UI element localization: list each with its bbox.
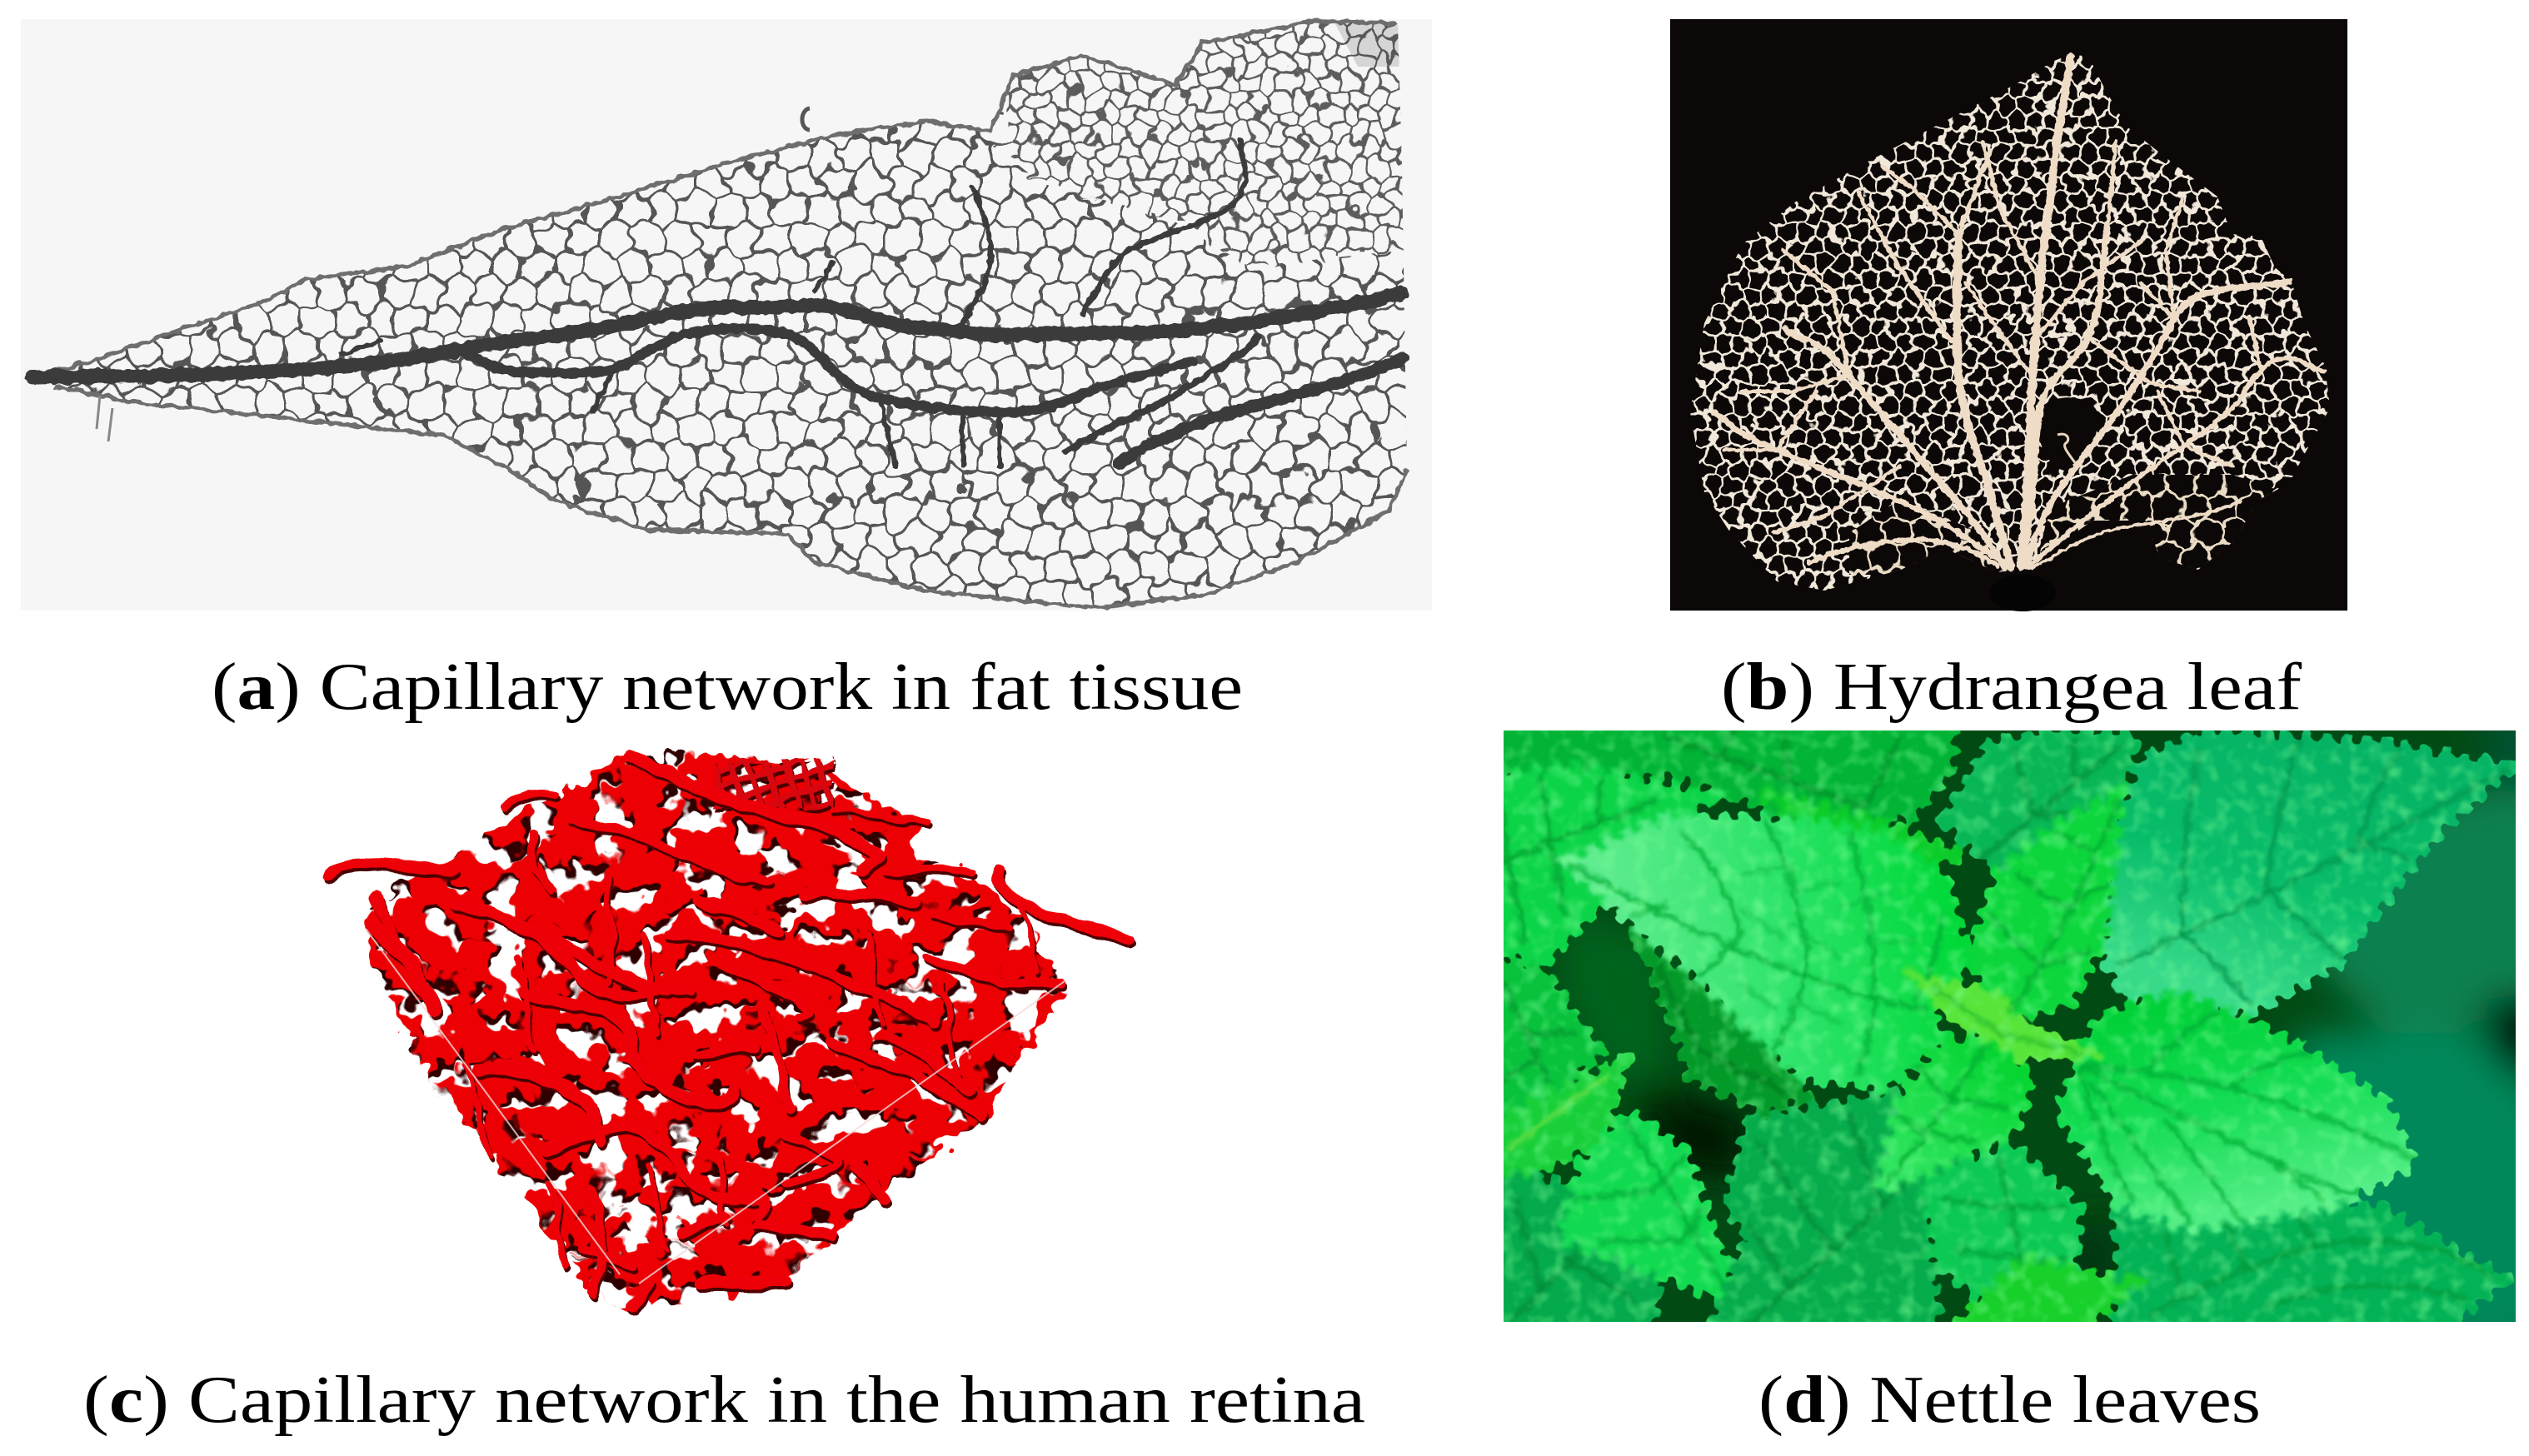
leaf hole bbox=[2038, 397, 2098, 471]
panel a: capillary network in fat tissue bbox=[0, 0, 1466, 633]
ink mark c bbox=[802, 108, 810, 130]
leaf: large upper right bbox=[2108, 733, 2510, 1010]
leaf vein mesh bbox=[1690, 55, 2329, 591]
leaf: left centre small bbox=[1644, 948, 1804, 1109]
leaf: bottom centre dark bbox=[1710, 1094, 1958, 1333]
main blood vessels bbox=[32, 141, 1402, 466]
leaf: centre lower bbox=[1881, 1038, 2032, 1189]
tissue outline bbox=[32, 21, 1407, 608]
caption a: (a) Capillary network in fat tissue bbox=[212, 651, 1243, 724]
stem bbox=[1989, 575, 2056, 611]
ink mark d bbox=[97, 396, 112, 441]
leaf: bottom left bbox=[1491, 1175, 1657, 1333]
leaf: lime bud left bbox=[1491, 1062, 1624, 1170]
caption c: (c) Capillary network in the human retina bbox=[83, 1364, 1365, 1437]
leaf: bottom centre bbox=[1924, 1147, 2078, 1312]
capillary mesh bbox=[47, 22, 1407, 608]
primary veins bbox=[1714, 57, 2324, 568]
panel d: nettle leaves bbox=[1504, 730, 2516, 1322]
panel b: hydrangea leaf skeleton bbox=[1658, 8, 2366, 625]
leaf: lime bud centre bbox=[1911, 975, 2105, 1057]
dense vessel cluster at top bbox=[713, 759, 833, 809]
leaf: top centre bbox=[1944, 733, 2135, 872]
caption d: (d) Nettle leaves bbox=[1758, 1364, 2261, 1437]
leaf: bottom right bbox=[2118, 1208, 2503, 1333]
leaf: large left centre bbox=[1569, 818, 1968, 1085]
faint bounding grid lines bbox=[366, 929, 1065, 1284]
large vessels bbox=[328, 756, 1130, 1308]
leaf: top left bbox=[1491, 725, 1951, 815]
serrated leaves bbox=[1491, 725, 2510, 1333]
dense tangled vessel mass bbox=[367, 748, 1068, 1313]
leaf: centre spear bbox=[1971, 795, 2118, 1019]
leaf: lower left bright bbox=[1563, 1114, 1737, 1303]
leaf: right lower bbox=[2058, 995, 2412, 1227]
leaf: left lower bbox=[1491, 962, 1599, 1119]
panel c: capillary network in the human retina bbox=[323, 748, 1136, 1316]
blurred background leaves bbox=[1566, 708, 2529, 1349]
caption b: (b) Hydrangea leaf bbox=[1721, 651, 2302, 724]
leaf: left bbox=[1491, 768, 1710, 962]
leaf: top bud bbox=[1760, 795, 1964, 862]
leaf: bottom bud bbox=[1949, 1260, 2132, 1333]
